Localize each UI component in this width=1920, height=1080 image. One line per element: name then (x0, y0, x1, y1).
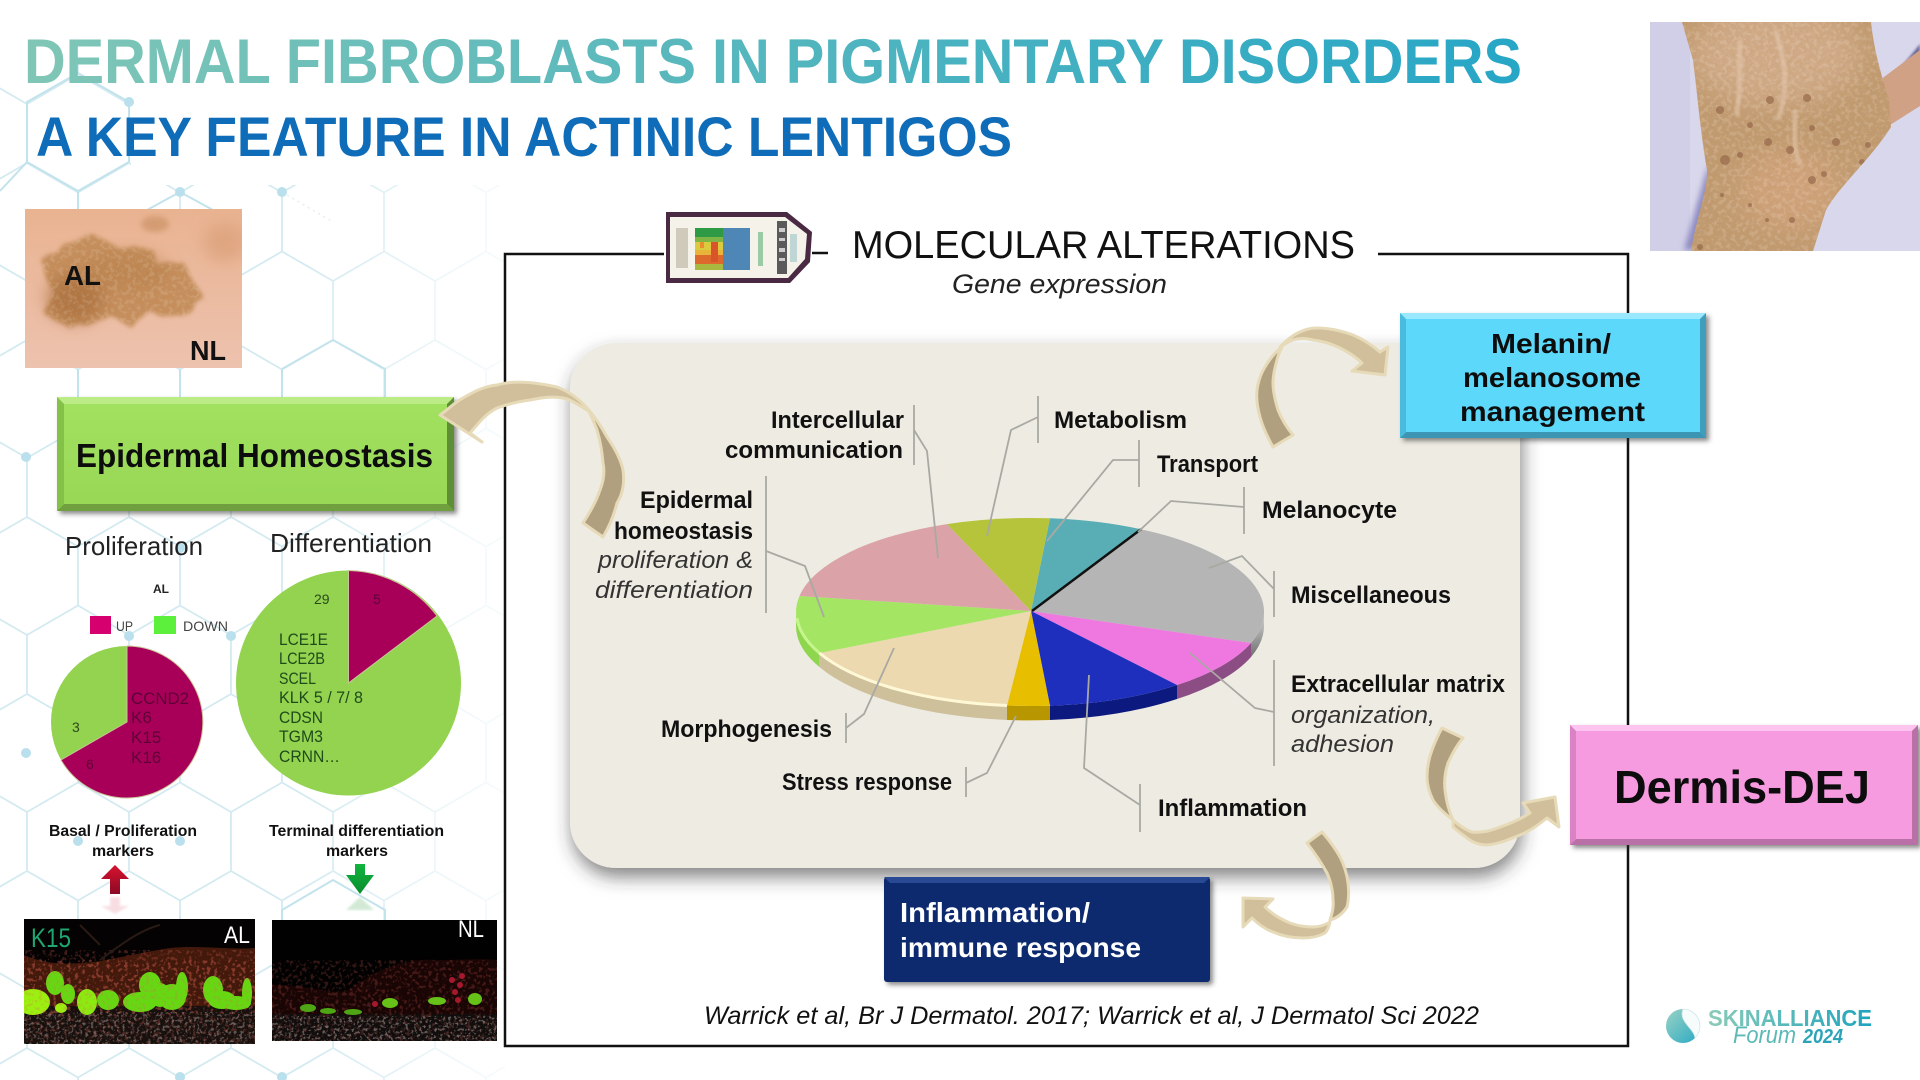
pie chart: differentiation: LCE1E (279, 630, 328, 649)
subheading: gene expression: Gene expression (952, 269, 1167, 299)
box: dermis-DEJ (1570, 725, 1918, 845)
pie labels: proliferation & (597, 547, 753, 574)
box: melanin management: Melanin/ (1491, 328, 1611, 359)
label: terminal differentiation markers: markers (326, 843, 388, 860)
arrow: pie to epidermal homeostasis (440, 382, 624, 537)
photo: hand with lentigos (1650, 5, 1920, 251)
pie labels: Epidermal (640, 487, 753, 514)
box: melanin management (1400, 313, 1706, 438)
arrow: pie to inflammation box (1243, 832, 1349, 938)
panel: beige pie background (570, 343, 1520, 868)
box: inflammation immune response: Inflammation/ (900, 897, 1090, 928)
label: terminal differentiation markers: Terminal differentiation (269, 823, 444, 840)
label: basal proliferation markers: Basal / Proliferation (49, 823, 197, 840)
pie labels: Melanocyte (1262, 497, 1397, 524)
pie chart: differentiation: 5 (373, 591, 381, 607)
pie labels: homeostasis (614, 518, 753, 545)
pie labels: Intercellular (771, 407, 904, 434)
photo: AL and NL skin (25, 209, 247, 368)
pie labels: Morphogenesis (661, 716, 832, 743)
label: terminal differentiation markers (269, 823, 444, 860)
heading: differentiation: Differentiation (270, 528, 432, 558)
logo: Skinalliance Forum 2024: SKINALLIANCE (1708, 1005, 1872, 1031)
icon: gene expression chip (666, 212, 812, 283)
legend: AL up and down (90, 582, 228, 634)
pie chart: proliferation: K16 (131, 748, 161, 767)
label: basal proliferation markers: markers (92, 843, 154, 860)
pie labels: communication (725, 437, 903, 464)
main frame outline (505, 253, 1628, 1046)
box: dermis-DEJ: Dermis-DEJ (1614, 761, 1870, 813)
pie labels: organization, (1291, 702, 1435, 729)
pie chart: proliferation (51, 646, 203, 798)
label: AL: AL (64, 260, 101, 291)
pie chart: differentiation: SCEL (279, 669, 316, 688)
pie chart: differentiation: TGM3 (279, 727, 323, 746)
citation: Warrick et al, Br J Dermatol. 2017; Warrick et al, J Dermatol Sci 2022 (704, 1002, 1479, 1030)
subtitle: A KEY FEATURE IN ACTINIC LENTIGOS (36, 105, 1012, 168)
micrograph: K15 in AL: K15 (31, 923, 71, 953)
pie sides (796, 612, 1264, 720)
box: inflammation immune response: immune response (900, 932, 1141, 963)
pie chart: proliferation: K6 (131, 708, 152, 727)
micrograph: K15 in AL: AL (224, 922, 250, 949)
pie chart: differentiation: KLK 5 / 7/ 8 (279, 688, 363, 707)
pie chart: gene categories (796, 518, 1264, 720)
pie labels: Inflammation (1158, 795, 1307, 822)
heading: proliferation: Proliferation (65, 531, 203, 561)
pie labels: Miscellaneous (1291, 582, 1451, 609)
pie labels: Transport (1157, 451, 1258, 478)
legend: AL up and down: UP (116, 618, 133, 634)
pie chart: differentiation (236, 570, 461, 796)
pie chart: differentiation: CRNN… (279, 747, 340, 766)
title: DERMAL FIBROBLASTS IN PIGMENTARY DISORDERS (24, 27, 1522, 97)
logo: Skinalliance Forum 2024: 2024 (1802, 1026, 1843, 1048)
pie chart: proliferation: CCND2 (131, 689, 189, 708)
micrograph: NL: NL (458, 916, 484, 943)
leader lines (766, 396, 1274, 832)
pie chart: differentiation: CDSN (279, 708, 323, 727)
pie labels: differentiation (595, 577, 753, 604)
label: basal proliferation markers (49, 823, 197, 860)
box: epidermal homeostasis (57, 397, 454, 511)
pie labels: Metabolism (1054, 407, 1187, 434)
pie labels (595, 407, 1506, 822)
logo: Skinalliance Forum 2024: Forum (1733, 1022, 1796, 1049)
pie labels: Extracellular matrix (1291, 671, 1506, 698)
legend: AL up and down: AL (153, 582, 169, 596)
box: inflammation immune response (884, 877, 1210, 982)
background hexagon pattern (0, 60, 531, 1080)
heading: molecular alterations: MOLECULAR ALTERATIONS (852, 224, 1355, 267)
pie chart: differentiation: 29 (314, 591, 330, 607)
box: melanin management: melanosome (1463, 362, 1641, 393)
pie chart: proliferation: 6 (86, 756, 94, 772)
arrow: red up (101, 865, 129, 914)
pie chart: proliferation: K15 (131, 728, 161, 747)
label: NL: NL (190, 335, 226, 366)
box: epidermal homeostasis: Epidermal Homeostasis (76, 437, 433, 474)
pie labels: adhesion (1291, 731, 1394, 758)
logo: Skinalliance Forum 2024 (1666, 1005, 1872, 1049)
arrow: green down (346, 864, 374, 910)
pie chart: differentiation: LCE2B (279, 649, 325, 668)
micrograph: NL (272, 916, 497, 1041)
micrograph: K15 in AL (16, 919, 255, 1044)
arrow: pie to melanin box (1257, 328, 1388, 447)
legend: AL up and down: DOWN (183, 618, 228, 634)
pie labels: Stress response (782, 769, 952, 796)
box: melanin management: management (1460, 396, 1645, 427)
arrow: pie to dermis box (1427, 728, 1559, 845)
pie chart: proliferation: 3 (72, 719, 80, 735)
